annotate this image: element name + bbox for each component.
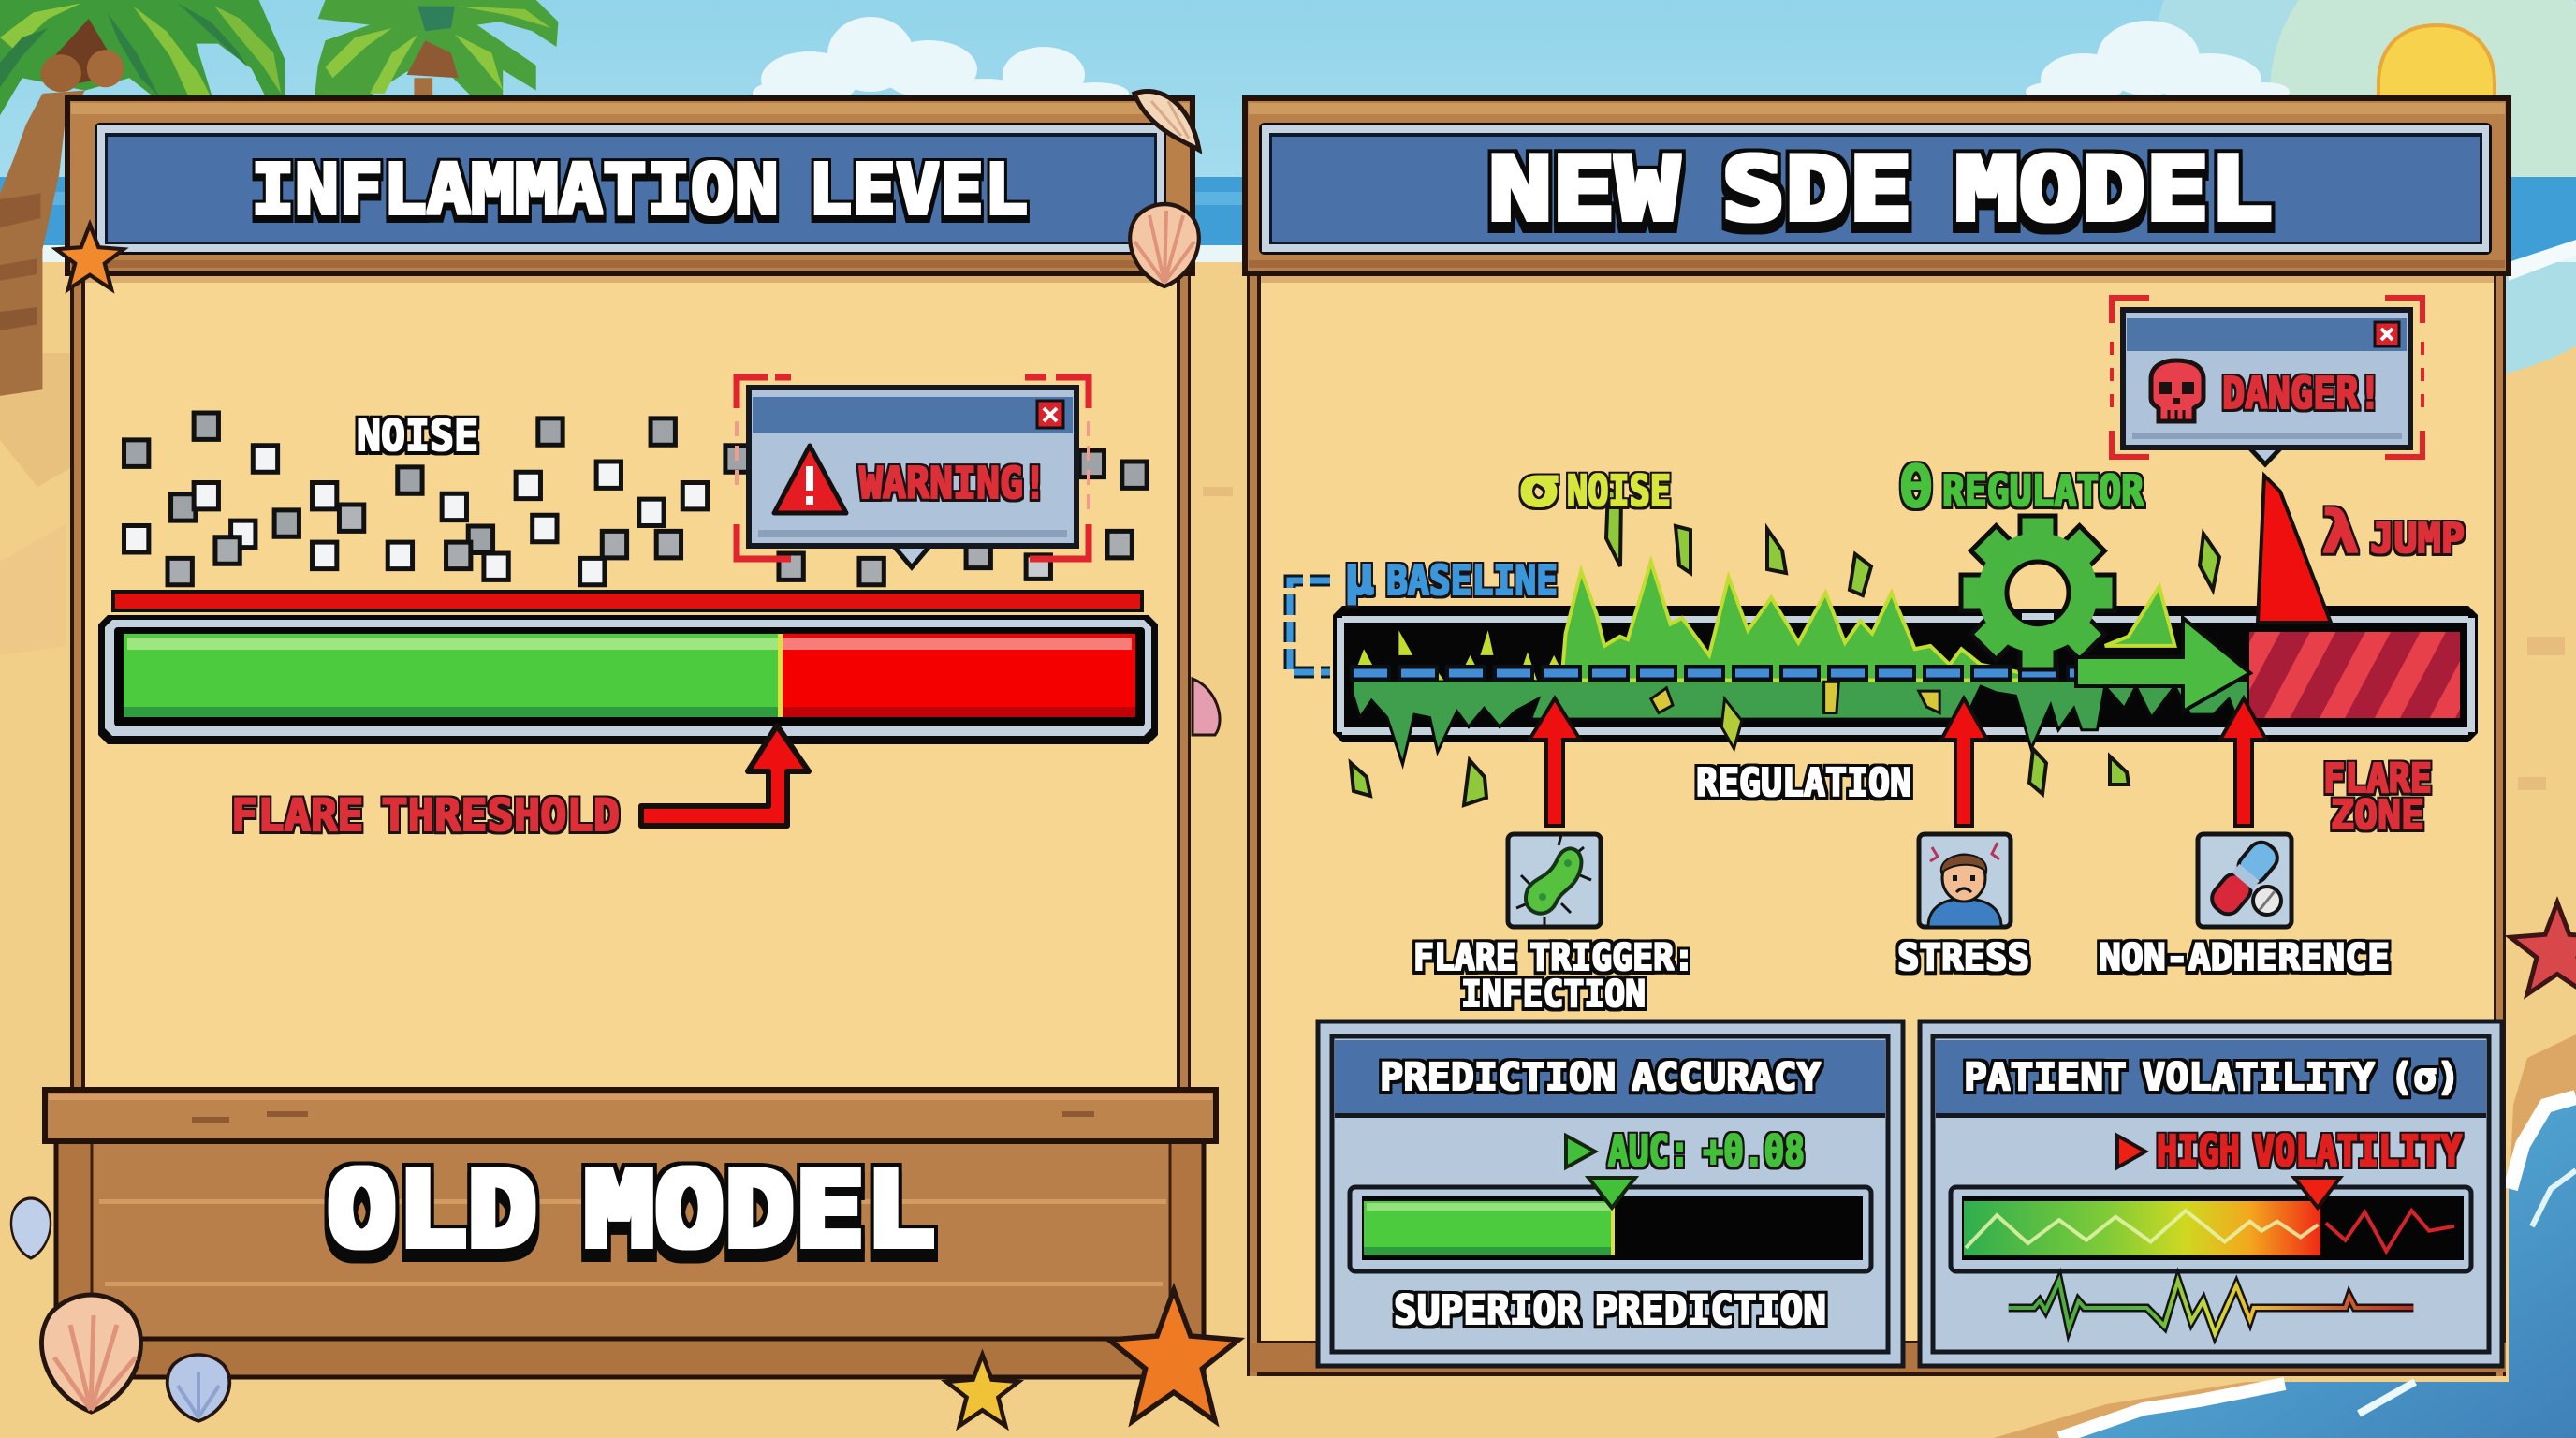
header: new SDE model: NEW SDE MODEL [1488, 139, 2273, 240]
icon: stressed person [1919, 834, 2011, 927]
text: danger: DANGER! [2222, 368, 2381, 418]
label: mu baseline [1344, 546, 1558, 607]
stat: AUC gain: AUC: +0.08 [1608, 1126, 1805, 1176]
chart: SDE process track [1333, 562, 2478, 764]
panel: new SDE model frame [1245, 98, 2509, 1376]
label: mu baseline: μ [1344, 546, 1374, 607]
starfish: red right edge [2510, 902, 2576, 994]
label: mu baseline: BASELINE [1386, 557, 1558, 605]
shell: spiral top right [1134, 92, 1199, 150]
icon: bacterium infection [1508, 834, 1601, 927]
danger dialog [2112, 298, 2422, 464]
label: theta regulator [1899, 455, 2144, 521]
label: flare trigger infection [1413, 937, 1694, 1016]
starfish: yellow [946, 1355, 1018, 1426]
icon: play marker [2117, 1136, 2145, 1167]
shell: pink right of bar [1193, 679, 1220, 735]
label: lambda jump: λ [2321, 498, 2360, 566]
crate: old model [45, 1090, 1216, 1377]
label: flare threshold: FLARE THRESHOLD [231, 790, 620, 842]
heading: prediction accuracy: PREDICTION ACCURACY [1380, 1056, 1821, 1099]
flare zone hatch [2249, 632, 2460, 718]
palm tree: second [315, 0, 558, 98]
panel: old model frame [67, 98, 1193, 1095]
label: theta regulator: θ [1899, 455, 1933, 521]
icon: medicine pill [2198, 834, 2291, 927]
arrow: regulation to flare zone [2076, 618, 2250, 712]
starfish: orange top left [56, 225, 124, 289]
green spikes above baseline [1357, 562, 2174, 681]
stat: high volatility: HIGH VOLATILITY [2157, 1126, 2462, 1176]
noise squares [124, 413, 1147, 585]
icon: skull [2151, 360, 2203, 421]
label: noise: NOISE [357, 411, 478, 461]
label: flare zone: ZONE [2331, 792, 2424, 839]
label: sigma noise [1518, 455, 1671, 519]
header: inflammation level: INFLAMMATION LEVEL [251, 150, 1028, 230]
panel: prediction accuracy [1318, 1021, 1903, 1366]
noise flecks [1351, 489, 2219, 805]
shell: pink scallop bottom left [41, 1295, 141, 1412]
flecks inside track [1651, 682, 1939, 749]
heading: patient volatility: PATIENT VOLATILITY (σ) [1964, 1056, 2460, 1099]
shell: scallop top right [1130, 204, 1199, 286]
label: lambda jump [2321, 498, 2465, 566]
clouds [753, 17, 2290, 108]
arrow: flare threshold pointer [641, 726, 809, 826]
arrow: stress trigger [1941, 698, 1987, 826]
label: non-adherence: NON-ADHERENCE [2099, 937, 2390, 979]
gauge: volatility [1951, 1178, 2471, 1271]
green band below baseline [1353, 681, 2248, 764]
starfish: orange large [1109, 1290, 1238, 1421]
shell: blue bottom left [168, 1355, 229, 1421]
caption: superior prediction: SUPERIOR PREDICTION [1394, 1287, 1826, 1334]
label: sigma noise: σ [1518, 455, 1559, 519]
red jump spike [2258, 476, 2331, 623]
arrow: non-adherence trigger [2220, 698, 2266, 826]
chart: volatility trace [2009, 1281, 2413, 1334]
sun [2378, 25, 2495, 98]
label: flare trigger infection: INFECTION [1461, 974, 1646, 1016]
baseline bracket [1290, 580, 1330, 672]
label: flare trigger infection: FLARE TRIGGER: [1413, 937, 1694, 979]
palm tree: left [0, 0, 285, 396]
inflammation bar [98, 592, 1158, 744]
panel: patient volatility [1920, 1021, 2502, 1366]
label: stress: STRESS [1897, 937, 2029, 979]
label: lambda jump: JUMP [2370, 515, 2465, 563]
progress bar: accuracy [1350, 1178, 1871, 1271]
header: inflammation level [95, 123, 1166, 255]
text: old model: OLD MODEL [327, 1150, 935, 1269]
warning dialog [737, 377, 1089, 567]
header: new SDE model [1259, 123, 2492, 255]
icon: regulator gear [1961, 516, 2115, 669]
arrow: infection trigger [1530, 698, 1580, 826]
shell: blue left edge [11, 1198, 51, 1258]
text: warning: WARNING! [859, 458, 1046, 508]
label: sigma noise: NOISE [1567, 466, 1671, 516]
label: flare zone [2323, 756, 2432, 839]
icon: warning triangle [774, 446, 846, 513]
label: regulation: REGULATION [1696, 760, 1911, 805]
label: flare zone: FLARE [2323, 756, 2432, 802]
baseline dashes [1350, 665, 2087, 682]
label: theta regulator: REGULATOR [1942, 466, 2144, 516]
icon: play marker [1566, 1136, 1595, 1167]
